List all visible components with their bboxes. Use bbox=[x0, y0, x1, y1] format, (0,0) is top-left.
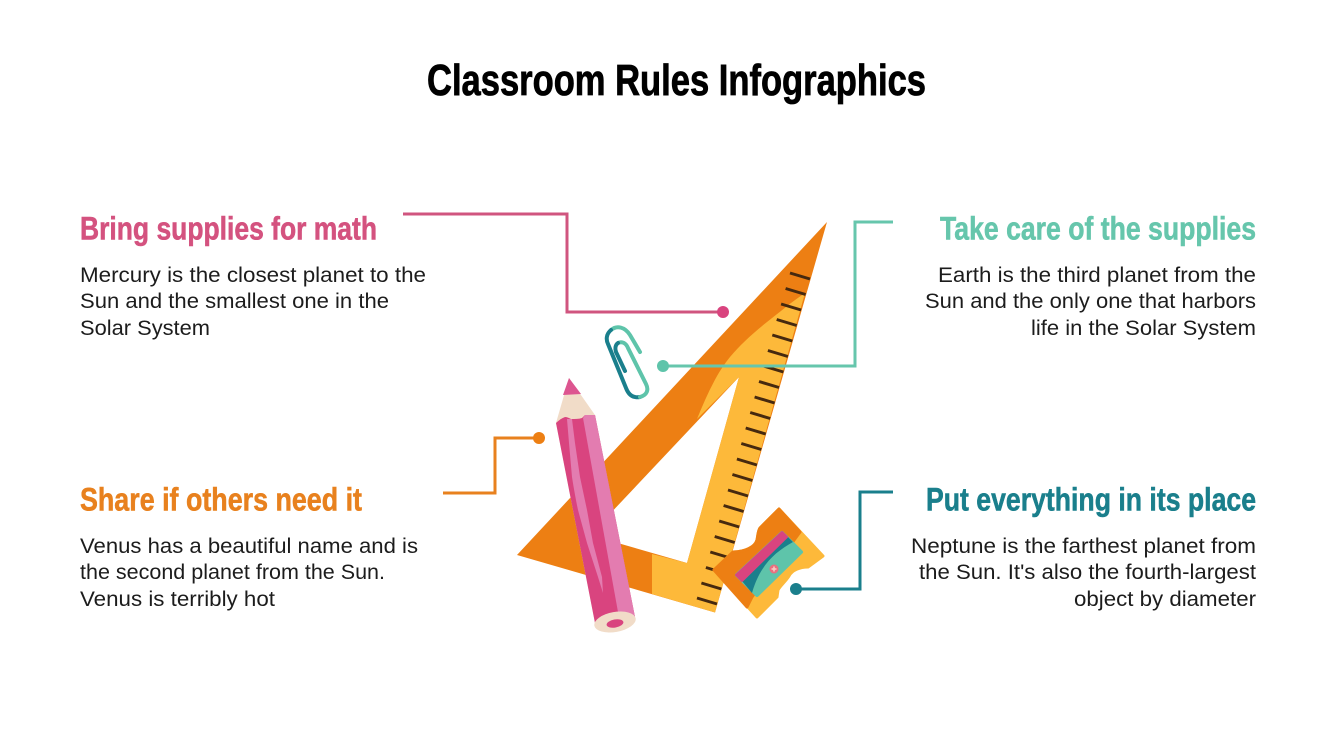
connector: orange bbox=[443, 432, 545, 493]
icon: paperclip bbox=[607, 327, 647, 397]
panel: take care of the supplies: Earth is the third planet from the bbox=[938, 264, 1256, 287]
panel: take care of the supplies: life in the Solar System bbox=[1031, 317, 1256, 340]
icon: pencil sharpener bbox=[714, 509, 823, 617]
illustration: set square ruler bbox=[517, 222, 827, 612]
connector: dark teal bbox=[790, 492, 893, 595]
icon: pencil bbox=[556, 378, 637, 635]
panel: bring supplies for math: Sun and the smallest one in the bbox=[80, 290, 389, 313]
panel: bring supplies for math: Solar System bbox=[80, 317, 210, 340]
panel: take care of the supplies: Take care of the supplies bbox=[940, 210, 1256, 246]
connector: teal bbox=[657, 222, 893, 372]
panel: bring supplies for math: Bring supplies for math bbox=[80, 210, 377, 246]
panel: bring supplies for math bbox=[80, 210, 426, 340]
panel: put everything in its place: Put everything in its place bbox=[926, 482, 1256, 518]
panel: take care of the supplies: Sun and the only one that harbors bbox=[925, 290, 1256, 313]
panel: take care of the supplies bbox=[925, 210, 1256, 340]
panel: share if others need it: Share if others need it bbox=[80, 482, 362, 518]
panel: put everything in its place: Neptune is the farthest planet from bbox=[911, 535, 1256, 558]
panel: share if others need it: Venus is terribly hot bbox=[80, 588, 275, 611]
panel: put everything in its place bbox=[911, 482, 1256, 611]
panel: share if others need it bbox=[80, 482, 418, 611]
panel: share if others need it: Venus has a beautiful name and is bbox=[80, 535, 418, 558]
connector: pink bbox=[403, 214, 729, 318]
panel: share if others need it: the second planet from the Sun. bbox=[80, 561, 385, 584]
panel: put everything in its place: object by diameter bbox=[1074, 588, 1256, 611]
panel: bring supplies for math: Mercury is the closest planet to the bbox=[80, 264, 426, 287]
title: Classroom Rules Infographics bbox=[427, 56, 926, 105]
panel: put everything in its place: the Sun. It's also the fourth-largest bbox=[919, 561, 1256, 584]
